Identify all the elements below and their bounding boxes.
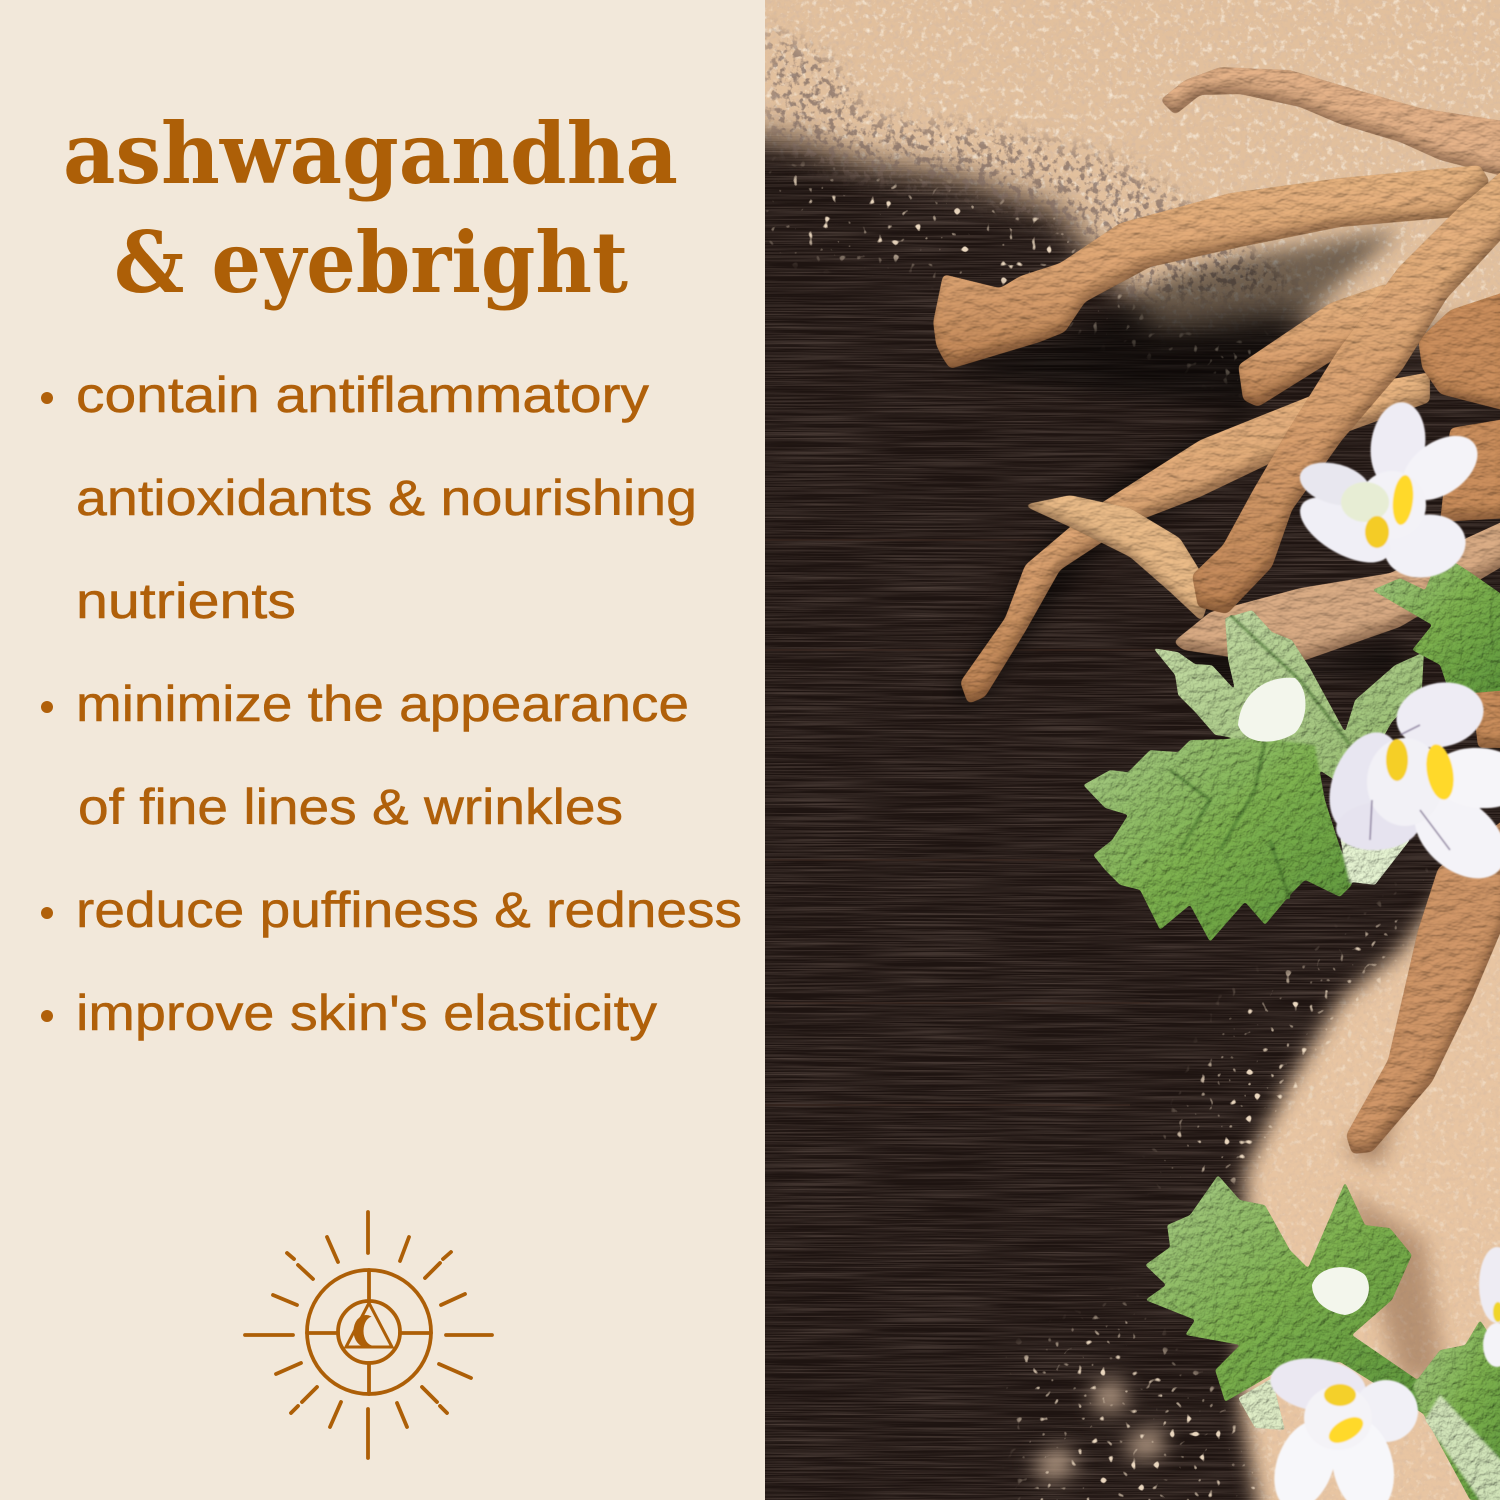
powder: top drift xyxy=(765,0,1500,360)
dark wood background xyxy=(765,0,1500,1500)
root: far right top chunk xyxy=(1418,290,1500,412)
bullet: fine lines xyxy=(41,676,689,835)
bullet: elasticity: improve skin's elasticity xyxy=(76,985,657,1041)
root: lower right xyxy=(1346,815,1500,1154)
root: stub xyxy=(1238,283,1394,407)
bullet: antiinflammatory: antioxidants & nourishing xyxy=(76,470,697,526)
benefits bullet list xyxy=(41,367,742,1041)
icon: sun emblem logo xyxy=(245,1212,492,1458)
leaf veins xyxy=(1170,615,1350,900)
bullet: antiinflammatory: contain antiflammatory xyxy=(76,367,649,423)
bud: lower xyxy=(1312,1267,1369,1315)
flower: upper xyxy=(1290,399,1489,585)
leaf cluster shadow xyxy=(1345,1190,1445,1380)
powder specks xyxy=(766,158,1428,1500)
bullet: fine lines: of fine lines & wrinkles xyxy=(78,779,623,835)
bullet: fine lines: minimize the appearance xyxy=(76,676,689,732)
title: & eyebright xyxy=(114,213,628,312)
lower root shadow xyxy=(1345,1090,1400,1165)
root: far right middle chunk xyxy=(1440,418,1500,522)
root shadows xyxy=(945,230,1400,705)
flower: bottom xyxy=(1263,1353,1418,1500)
powder: dark haze on top edge xyxy=(765,20,1294,302)
root: top right xyxy=(1160,67,1500,178)
flower: middle xyxy=(1316,675,1500,895)
roots xyxy=(933,67,1500,1154)
root: far right lower chunk xyxy=(1470,660,1500,748)
photo panel: wood, powder, roots and flowers xyxy=(765,0,1500,1500)
leaves: middle cluster xyxy=(1083,610,1424,942)
bullet: antiinflammatory xyxy=(41,367,697,629)
root: main left with fork xyxy=(933,165,1490,369)
root: thin long left xyxy=(960,372,1430,704)
panel: cream text background xyxy=(0,0,764,1500)
powder: lower right drift xyxy=(1224,881,1500,1500)
bullet: puffiness: reduce puffiness & redness xyxy=(76,882,742,938)
powder puffs on wood xyxy=(1030,1378,1165,1482)
title xyxy=(63,104,678,312)
root: pale branch xyxy=(1022,495,1212,622)
title: ashwagandha xyxy=(63,104,678,203)
root: large diagonal xyxy=(1192,164,1500,614)
leaves: bottom cluster xyxy=(1145,1175,1500,1500)
leaves: upper right xyxy=(1372,553,1500,695)
root: horizontal lower xyxy=(1173,518,1500,662)
flower: edge partial xyxy=(1479,1247,1500,1367)
bullet: antiinflammatory: nutrients xyxy=(76,573,296,629)
bud: upper xyxy=(1238,678,1306,742)
